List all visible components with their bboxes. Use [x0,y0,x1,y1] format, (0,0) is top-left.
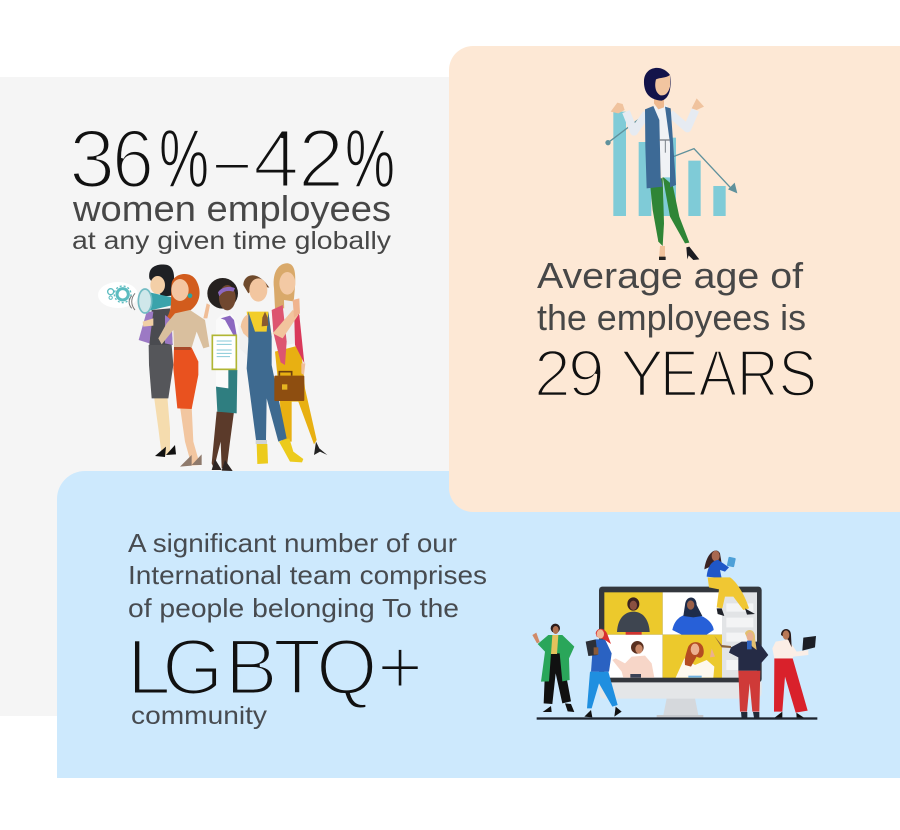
heading: 36%-42%: – [215,112,250,205]
icon: monitor [599,587,762,718]
person: sitting woman with tablet [704,550,755,616]
panel: women employees [0,77,470,716]
text: average age of the employees is: Average age of [537,255,804,296]
video tile: woman in pink sweater [612,641,654,678]
video tile: woman with red hair [676,642,715,678]
heading: 36%-42%: 3 [69,112,115,205]
heading: LGBTQ+: LGBTQ+ [127,622,423,711]
text: significant number of our international team: of people belonging To the [128,593,459,623]
heading: 36%-42%: 6 [112,112,154,205]
text: average age of the employees is [537,255,806,338]
heading: 36%-42%: 4 [253,112,299,205]
panel: average age (peach) [449,46,900,512]
heading: 29 YEARS: EARS [660,336,817,410]
illustration: woman in front of declining bar chart [605,68,737,260]
woman 2: red hair and orange skirt [158,274,210,467]
video tile: woman in hijab [672,597,714,635]
woman 1: megaphone [139,264,176,457]
heading: 36%-42% [69,112,395,205]
person: woman in blue suit [584,629,622,717]
person: woman with pointer and red trousers [714,630,768,719]
heading: 29 YEARS: 29 [534,336,605,410]
bar chart [613,112,726,216]
illustration: group of five women [98,263,327,471]
woman 4: overalls and yellow boots [239,275,303,464]
arrow: declining trend [605,118,737,193]
icon: briefcase [274,372,304,401]
icon: megaphone [129,289,173,313]
heading: 29 YEARS [534,336,817,410]
heading: 36%-42%: % [345,112,395,205]
icon: speech bubble with gears [98,282,138,308]
heading: 36%-42%: % [159,112,209,205]
person: woman in green coat [532,624,574,712]
illustration: video call monitor with team [532,550,817,720]
text: significant number of our international team [128,528,487,623]
woman 3: clipboard and teal skirt [207,278,238,471]
video tile: woman in dark top [617,597,650,635]
panel: community (blue) [57,471,900,778]
ground line [537,717,817,720]
text: women employees: women employees [72,188,391,229]
text: significant number of our international team: A significant number of our [128,528,457,558]
heading: 36%-42%: 2 [298,112,344,205]
text: at any given time globally: at any given time globally [72,227,392,255]
woman 5: blonde with briefcase [274,263,327,455]
person: woman with laptop and red wide trousers [772,629,816,719]
woman: body [611,68,704,260]
text: community: community [131,702,268,730]
heading: 29 YEARS: Y [620,336,664,410]
text: average age of the employees is: the employees is [537,297,806,338]
text: significant number of our international team: International team comprises [128,560,487,590]
